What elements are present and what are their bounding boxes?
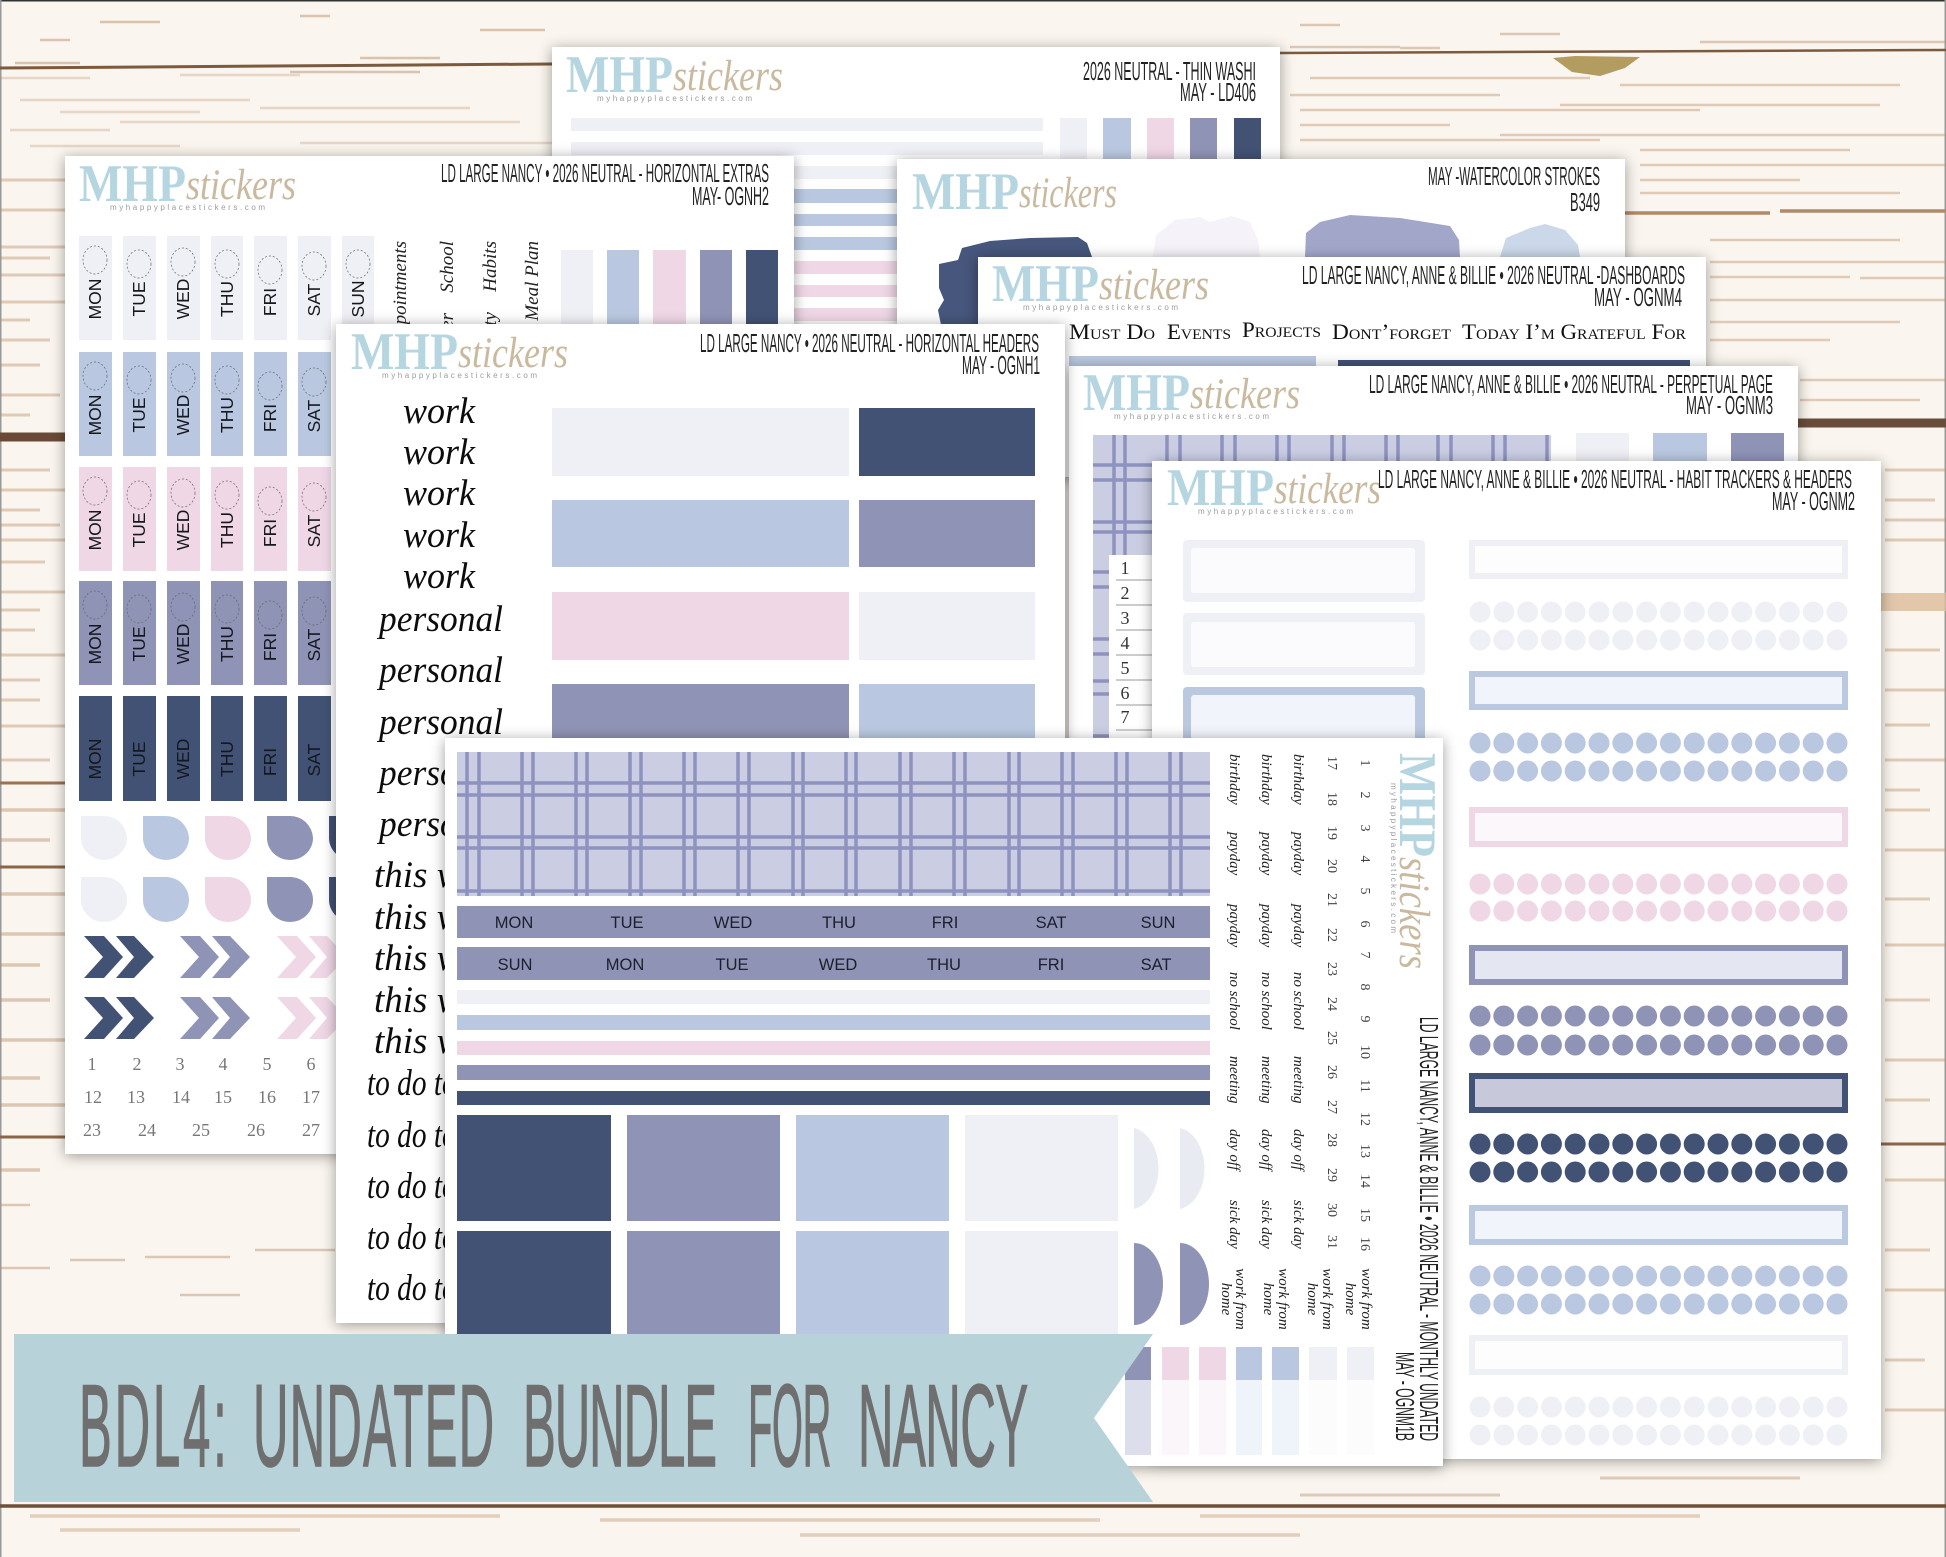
rotated category labels: Appointments (390, 241, 411, 348)
plaid block (1093, 435, 1551, 855)
rotated occasion labels: work from (1232, 1268, 1248, 1330)
week strip: sunday start: SAT (1141, 956, 1171, 974)
rotated date numbers: 11 (1357, 1079, 1372, 1093)
rotated date numbers: 15 (1357, 1208, 1372, 1222)
panel: horizontal headers sheet: MAY - OGNH1 (962, 350, 1040, 380)
date numbers strip: 3 (1120, 608, 1130, 628)
script word list: to do today (367, 1217, 499, 1258)
script word list: work (403, 432, 476, 473)
rotated date numbers: 26 (1324, 1065, 1339, 1079)
date numbers strip (1109, 555, 1160, 755)
rotated occasion labels: payday (1226, 831, 1242, 876)
script word list: this week (374, 1021, 511, 1062)
script word list (367, 391, 511, 1309)
number stickers: 4 (218, 1054, 228, 1074)
watercolor stroke: pale (1153, 216, 1260, 257)
weekday tabs row: blue: WED (173, 395, 193, 435)
script word list: work (403, 515, 476, 556)
logo: stickers (186, 162, 296, 209)
teardrop shapes (81, 816, 375, 922)
logo: myhappyplacestickers.com (110, 203, 265, 212)
rotated occasion labels: no school (1290, 972, 1306, 1030)
plaid washi block (457, 752, 1210, 896)
watercolor stroke: blue (1500, 224, 1580, 257)
number stickers: 1 (88, 1054, 96, 1074)
rotated occasion labels: meeting (1258, 1056, 1274, 1104)
weekday tabs row: blue: THU (217, 397, 237, 433)
banner title: BUNDLE (523, 1362, 717, 1492)
rotated date numbers: 18 (1324, 792, 1339, 806)
dashboard headings: Dont’forget (1332, 319, 1451, 344)
logo (912, 163, 1117, 221)
panel: habit trackers and headers sheet: MAY - OGNM2 (1772, 486, 1855, 516)
rotated date numbers: 1 (1357, 760, 1372, 766)
week strip: monday start: FRI (932, 914, 958, 932)
rotated category labels: Activity (480, 311, 501, 372)
rotated occasion labels: payday (1258, 831, 1274, 876)
weekday tabs row: navy: FRI (260, 748, 280, 776)
banner title (79, 1360, 1028, 1492)
rotated occasion labels: day off (1290, 1129, 1306, 1172)
left header boxes (1183, 540, 1425, 749)
rotated occasion labels: sick day (1226, 1200, 1242, 1249)
rotated occasion labels: home (1342, 1283, 1358, 1316)
title (700, 328, 1040, 380)
banner title: NANCY (858, 1362, 1028, 1492)
title (441, 158, 769, 211)
number stickers: 3 (176, 1054, 184, 1074)
rotated date numbers: 3 (1357, 824, 1372, 832)
rotated date numbers: 27 (1324, 1100, 1339, 1114)
week strip: monday start: SUN (1141, 914, 1175, 932)
weekday tabs row: blue: TUE (129, 398, 149, 432)
rotated occasion labels: day off (1258, 1129, 1274, 1172)
weekday tabs row: blue: MON (85, 395, 105, 435)
banner title: FOR (748, 1360, 831, 1491)
logo: MHP (566, 46, 673, 104)
washi stripes (571, 118, 1043, 321)
text: LD LARGE NANCY • 2026 NEUTRAL - HORIZONTAL HEADERS (700, 328, 1039, 358)
panel: monthly undated sheet: MAY - OGNM1B (1390, 1352, 1420, 1441)
knot (1553, 56, 1640, 76)
rotated occasion labels: day off (1226, 1129, 1242, 1172)
header bars and habit dots (1472, 543, 1845, 1435)
banner ribbon (14, 1334, 1153, 1502)
rotated date numbers: 17 (1324, 756, 1339, 770)
week strip: sunday start: WED (819, 956, 857, 974)
rotated occasion labels: home (1304, 1283, 1320, 1316)
rotated occasion labels: birthday (1258, 754, 1274, 805)
script word list: to do today (367, 1063, 499, 1104)
logo: myhappyplacestickers.com (597, 94, 752, 103)
weekday tabs row: pink: MON (85, 510, 105, 550)
logo: stickers (1019, 170, 1117, 217)
dashboard bars (1069, 356, 1690, 380)
rotated occasion labels: birthday (1290, 754, 1306, 805)
number stickers: 5 (262, 1054, 272, 1074)
rotated date numbers: 6 (1357, 920, 1372, 928)
rotated date numbers: 9 (1357, 1016, 1372, 1022)
panel: monthly undated sheet (445, 738, 1446, 1466)
panel: watercolor strokes sheet: MAY -WATERCOLOR STROKES (1428, 161, 1600, 191)
rotated occasion labels: sick day (1258, 1200, 1274, 1249)
week strip: sunday start: MON (606, 956, 644, 974)
weekday tabs row: navy (79, 696, 331, 801)
rotated category labels: Teacher (437, 312, 458, 374)
watercolor stroke: purple (1305, 215, 1460, 257)
weekday tabs row: pink: TUE (129, 512, 149, 548)
rotated occasion labels: work from (1319, 1268, 1335, 1330)
weekday tabs row: navy: MON (85, 739, 105, 779)
panel: watercolor strokes sheet: B349 (1570, 187, 1600, 217)
text: LD LARGE NANCY • 2026 NEUTRAL - HORIZONTAL EXTRAS (441, 158, 769, 188)
panel: thin washi sheet: 2026 NEUTRAL - THIN WASHI (1083, 56, 1256, 86)
weekday tabs row: purple: TUE (129, 626, 149, 662)
script word list: personal (376, 804, 503, 845)
watercolor stroke: navy (938, 237, 1092, 330)
dashboard headings: Must Do (1069, 319, 1155, 344)
number stickers: 6 (306, 1054, 316, 1074)
logo (992, 255, 1209, 313)
logo: stickers (1190, 371, 1300, 418)
rotated occasion labels (1218, 754, 1374, 1330)
rotated date numbers: 25 (1324, 1031, 1339, 1045)
rotated logo: stickers (1390, 857, 1437, 969)
script word list: to do today (367, 1268, 499, 1309)
swatches (1576, 433, 1784, 473)
number stickers: 2 (132, 1054, 142, 1074)
dashboard headings: Events (1167, 319, 1231, 344)
rotated date numbers: 19 (1324, 826, 1339, 840)
number stickers: 25 (192, 1120, 210, 1140)
weekday tabs row: purple: WED (173, 624, 193, 664)
rotated category labels: Habits (480, 241, 501, 293)
week strip: monday start: SAT (1036, 914, 1066, 932)
title (1378, 464, 1855, 516)
logo: stickers (1274, 466, 1381, 513)
logo (79, 155, 296, 213)
week strip: monday start: TUE (610, 914, 644, 932)
rotated date numbers: 28 (1324, 1133, 1339, 1147)
weekday tabs row: pink: THU (217, 512, 237, 548)
weekday tabs row: light: MON (85, 279, 105, 319)
rotated date numbers: 29 (1324, 1168, 1339, 1182)
rotated occasion labels: work from (1358, 1268, 1374, 1330)
weekday tabs row: light: THU (217, 281, 237, 317)
logo: myhappyplacestickers.com (382, 371, 537, 380)
banner title: UNDATED (253, 1362, 494, 1492)
chevron arrows (84, 936, 347, 1039)
rotated date numbers: 23 (1324, 962, 1339, 976)
rotated category labels (390, 241, 543, 374)
weekday tabs row: light (79, 236, 374, 340)
logo: stickers (458, 330, 568, 377)
half circles (1134, 1128, 1209, 1325)
rotated date numbers: 13 (1357, 1144, 1372, 1158)
date numbers strip: 6 (1120, 683, 1130, 703)
weekday tabs row: blue (79, 352, 331, 456)
week strip: sunday start: SUN (498, 956, 532, 974)
rotated occasion labels: birthday (1226, 754, 1242, 805)
number stickers: 16 (258, 1087, 276, 1107)
rotated occasion labels: no school (1226, 972, 1242, 1030)
panel: horizontal extras sheet (65, 155, 794, 1154)
weekday tabs row: purple (79, 581, 331, 685)
rotated date numbers: 2 (1357, 792, 1372, 798)
rotated date numbers: 16 (1357, 1237, 1372, 1251)
weekday tabs row: navy: THU (217, 741, 237, 777)
weekday tabs row: light: TUE (129, 282, 149, 316)
weekday tabs row: pink: WED (173, 510, 193, 550)
weekday tabs row: light: WED (173, 279, 193, 319)
weekday tabs row: purple: SAT (304, 628, 324, 661)
script word list: work (403, 556, 476, 597)
weekday tabs row: blue: FRI (260, 404, 280, 432)
script word list: work (403, 391, 476, 432)
date numbers strip: 1 (1120, 558, 1130, 578)
number stickers (83, 1054, 320, 1140)
panel: dashboards sheet (978, 255, 1706, 477)
logo (566, 46, 783, 104)
date numbers strip: 4 (1120, 633, 1130, 653)
title (1302, 260, 1685, 312)
rotated date numbers: 8 (1357, 984, 1372, 990)
colour squares (457, 1115, 1118, 1339)
rotated date numbers: 12 (1357, 1112, 1372, 1126)
panel: thin washi sheet: MAY - LD406 (1180, 77, 1256, 107)
script word list: personal (376, 702, 503, 743)
rotated date numbers: 7 (1357, 952, 1372, 958)
rotated category labels: Meal Plan (522, 241, 543, 322)
script word list: personal (376, 753, 503, 794)
date numbers strip: 5 (1120, 658, 1130, 678)
rotated occasion labels: home (1218, 1283, 1234, 1316)
weekday tabs row: pink (79, 467, 331, 571)
number stickers: 24 (138, 1120, 156, 1140)
number stickers: 13 (127, 1087, 145, 1107)
logo: MHP (992, 255, 1099, 313)
rotated occasion labels: payday (1290, 903, 1306, 948)
logo: myhappyplacestickers.com (1198, 507, 1353, 516)
panel: horizontal headers sheet (336, 323, 1065, 1323)
script word list: this week (374, 897, 511, 938)
rotated date numbers: 30 (1324, 1203, 1339, 1217)
rotated category labels: School (437, 241, 458, 293)
dashboard headings (1069, 317, 1686, 344)
rotated date numbers: 22 (1324, 928, 1339, 942)
number stickers: 27 (302, 1120, 320, 1140)
weekday tabs row: purple: MON (85, 624, 105, 664)
logo: myhappyplacestickers.com (1023, 303, 1178, 312)
logo: MHP (351, 323, 458, 381)
panel: watercolor strokes sheet (897, 159, 1625, 419)
rotated date numbers: 31 (1324, 1235, 1339, 1249)
number stickers: 14 (172, 1087, 190, 1107)
week strip: sunday start: TUE (716, 956, 748, 974)
panel: thin washi sheet (552, 46, 1280, 367)
weekday tabs row: light: SAT (304, 283, 324, 316)
rotated occasion labels: payday (1226, 903, 1242, 948)
title (1428, 161, 1600, 217)
number stickers: 12 (84, 1087, 102, 1107)
panel: horizontal extras sheet: MAY- OGNH2 (692, 181, 769, 211)
panel: habit trackers and headers sheet (1152, 459, 1881, 1459)
header colour blocks (552, 408, 1035, 752)
number stickers: 26 (247, 1120, 265, 1140)
week strip: sunday start (457, 947, 1210, 980)
logo: MHP (1167, 459, 1274, 517)
rotated occasion labels: payday (1290, 831, 1306, 876)
logo: stickers (1099, 262, 1209, 309)
weekday tabs row: navy: TUE (129, 742, 149, 776)
script word list: this week (374, 938, 511, 979)
rotated occasion labels: meeting (1226, 1056, 1242, 1104)
weekday tabs row: purple: FRI (260, 633, 280, 661)
dashboard headings: Today I’m Grateful For (1462, 319, 1686, 344)
colour tabs (1125, 1347, 1374, 1455)
logo: MHP (1083, 364, 1190, 422)
rotated logo: myhappyplacestickers.com (1389, 783, 1398, 933)
weekday tabs row: light: FRI (260, 288, 280, 316)
week strip: monday start: WED (714, 914, 752, 932)
weekday tabs row: light: SUN (348, 281, 368, 317)
logo: MHP (912, 163, 1019, 221)
rotated date numbers (1324, 756, 1372, 1251)
number stickers: 23 (83, 1120, 101, 1140)
title (1369, 369, 1773, 420)
week strip: monday start: THU (822, 914, 856, 932)
rotated date numbers: 24 (1324, 997, 1339, 1011)
rotated date numbers: 5 (1357, 888, 1372, 894)
colour swatches (1060, 118, 1261, 168)
script word list: this week (374, 855, 511, 896)
rotated occasion labels: work from (1275, 1268, 1291, 1330)
logo (1167, 459, 1381, 517)
logo (351, 323, 568, 381)
rotated occasion labels: payday (1258, 903, 1274, 948)
banner title: BDL4: (79, 1362, 227, 1492)
rotated logo (1388, 753, 1446, 969)
script word list: personal (376, 599, 503, 640)
title (1083, 56, 1256, 107)
rotated title (1390, 1017, 1444, 1441)
script word list: work (403, 473, 476, 514)
title: MAY - OGNM4 (1594, 282, 1682, 312)
rotated date numbers: 14 (1357, 1174, 1372, 1188)
weekday tabs row: navy: SAT (304, 743, 324, 776)
logo: MHP (79, 155, 186, 213)
colour swatches (561, 250, 778, 330)
rotated date numbers: 21 (1324, 893, 1339, 907)
script word list: to do today (367, 1115, 499, 1156)
rotated date numbers: 10 (1357, 1045, 1372, 1059)
week strip: monday start (457, 906, 1210, 938)
dashboard headings: Projects (1242, 317, 1321, 342)
thin colour stripes (457, 990, 1210, 1105)
script word list: to do today (367, 1166, 499, 1207)
rotated logo: MHP (1388, 753, 1446, 857)
logo: stickers (673, 53, 783, 100)
title: MAY - OGNM3 (1686, 390, 1773, 420)
date numbers strip: 7 (1120, 707, 1130, 727)
script word list: this week (374, 980, 511, 1021)
number stickers: 15 (214, 1087, 232, 1107)
rotated date numbers: 4 (1357, 856, 1372, 862)
date numbers strip: 2 (1120, 583, 1130, 603)
panel: perpetual page sheet (1069, 364, 1798, 866)
week strip: sunday start: FRI (1038, 956, 1064, 974)
logo: myhappyplacestickers.com (1114, 412, 1269, 421)
week strip: monday start: MON (495, 914, 533, 932)
weekday tabs row: pink: FRI (260, 519, 280, 547)
script word list: personal (376, 650, 503, 691)
rotated occasion labels: meeting (1290, 1056, 1306, 1104)
rotated date numbers: 20 (1324, 859, 1339, 873)
rotated occasion labels: home (1260, 1283, 1276, 1316)
logo (1083, 364, 1300, 422)
weekday tabs row: pink: SAT (304, 514, 324, 547)
rotated occasion labels: no school (1258, 972, 1274, 1030)
week strip: sunday start: THU (927, 956, 961, 974)
rotated occasion labels: sick day (1290, 1200, 1306, 1249)
weekday tabs row: navy: WED (173, 739, 193, 779)
number stickers: 17 (302, 1087, 320, 1107)
weekday tabs row: purple: THU (217, 626, 237, 662)
weekday tabs row: blue: SAT (304, 399, 324, 432)
